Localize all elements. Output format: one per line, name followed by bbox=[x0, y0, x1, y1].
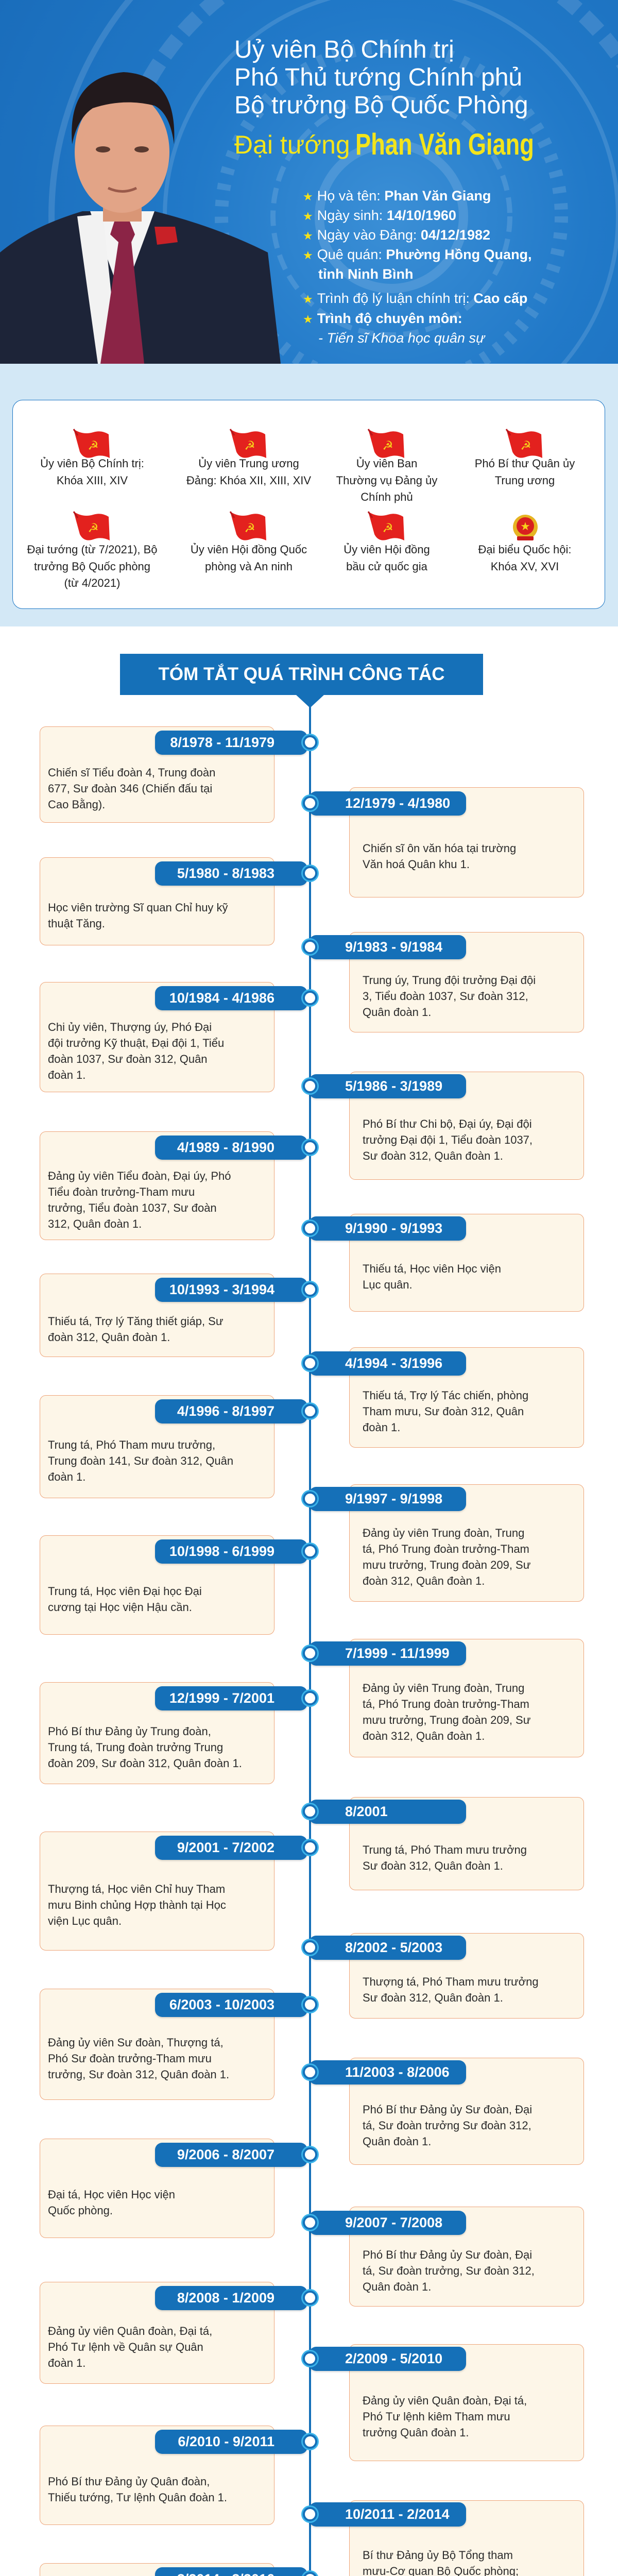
entry 9/2007: tá, Sư đoàn trưởng, Sư đoàn 312, bbox=[363, 2264, 535, 2277]
entry 8/2008: Đảng ủy viên Quân đoàn, Đại tá, bbox=[48, 2325, 212, 2337]
entry 9/2007: Quân đoàn 1. bbox=[363, 2280, 431, 2293]
date: 9/2001 - 7/2002: 9/2001 - 7/2002 bbox=[177, 1840, 274, 1855]
position text 8: Khóa XV, XVI bbox=[491, 560, 559, 573]
position text 7: Ủy viên Hội đồng bbox=[344, 543, 430, 556]
date: 8/1978 - 11/1979: 8/1978 - 11/1979 bbox=[170, 735, 274, 750]
date: 11/2003 - 8/2006 bbox=[309, 2060, 466, 2084]
entry 7/1999: tá, Phó Trung đoàn trưởng-Tham bbox=[363, 1698, 529, 1710]
date: 10/1998 - 6/1999 bbox=[155, 1539, 307, 1564]
info list: ★ Trình độ lý luận chính trị: Cao cấp bbox=[303, 291, 527, 306]
entry 7/1999 bbox=[349, 1639, 584, 1757]
entry 2/2009: Phó Tư lệnh kiêm Tham mưu bbox=[363, 2410, 510, 2423]
icon: party flag 4 bbox=[506, 429, 542, 458]
icon: national emblem: ★ bbox=[520, 520, 530, 533]
portrait photo bbox=[0, 72, 281, 364]
date: 10/1984 - 4/1986: 10/1984 - 4/1986 bbox=[169, 990, 274, 1006]
entry 9/1997 bbox=[349, 1484, 584, 1602]
entry 9/2007: Phó Bí thư Đảng ủy Sư đoàn, Đại bbox=[363, 2248, 532, 2261]
position text 3: Ủy viên Ban bbox=[356, 457, 417, 470]
entry 9/2001 bbox=[40, 1832, 274, 1951]
position text 1 bbox=[40, 456, 144, 486]
entry 6/2003: Phó Sư đoàn trưởng-Tham mưu bbox=[48, 2052, 212, 2065]
entry 12/1979 bbox=[349, 787, 584, 897]
date: 9/2001 - 7/2002 bbox=[155, 1836, 307, 1860]
date: 10/1998 - 6/1999: 10/1998 - 6/1999 bbox=[169, 1544, 274, 1559]
entry 4/1989: trưởng, Tiểu đoàn 1037, Sư đoàn bbox=[48, 1201, 217, 1214]
position text 7 bbox=[344, 543, 430, 573]
date: 8/2001: 8/2001 bbox=[345, 1804, 388, 1819]
entry 8/1978: Chiến sĩ Tiểu đoàn 4, Trung đoàn bbox=[48, 766, 215, 779]
entry 10/1984: đội trưởng Kỹ thuật, Đại đội 1, Tiểu bbox=[48, 1037, 224, 1049]
entry 4/1994: Thiếu tá, Trợ lý Tác chiến, phòng bbox=[363, 1389, 528, 1402]
entry 10/2011 bbox=[349, 2500, 584, 2576]
entry 11/2003 bbox=[349, 2058, 584, 2165]
date: 9/1997 - 9/1998 bbox=[309, 1487, 466, 1511]
date: 8/2002 - 5/2003: 8/2002 - 5/2003 bbox=[345, 1940, 442, 1955]
entry 8/2001 bbox=[349, 1797, 584, 1890]
entry 4/1994: Tham mưu, Sư đoàn 312, Quân bbox=[363, 1405, 524, 1418]
positions section background bbox=[0, 364, 618, 626]
entry 4/1996: Trung đoàn 141, Sư đoàn 312, Quân bbox=[48, 1454, 233, 1467]
date: 6/2003 - 10/2003 bbox=[155, 1993, 307, 2017]
title bbox=[234, 36, 528, 119]
entry 9/2006 bbox=[40, 2139, 274, 2238]
entry 6/2003: Đảng ủy viên Sư đoàn, Thượng tá, bbox=[48, 2036, 224, 2048]
node bbox=[303, 1140, 317, 1155]
date: 10/2011 - 2/2014 bbox=[309, 2502, 466, 2527]
entry 7/1999: đoàn 312, Quân đoàn 1. bbox=[363, 1730, 485, 1742]
date: 8/1978 - 11/1979 bbox=[155, 731, 307, 755]
entry 10/2011: Bí thư Đảng ủy Bộ Tổng tham bbox=[363, 2549, 513, 2562]
node bbox=[303, 2572, 317, 2576]
date: 4/1994 - 3/1996 bbox=[309, 1351, 466, 1376]
entry 10/1993 bbox=[40, 1274, 274, 1357]
date: 2/2009 - 5/2010: 2/2009 - 5/2010 bbox=[345, 2351, 442, 2366]
entry 6/2010: Thiếu tướng, Tư lệnh Quân đoàn 1. bbox=[48, 2490, 227, 2504]
entry 9/1990 bbox=[349, 1214, 584, 1312]
entry 10/1998 bbox=[40, 1535, 274, 1635]
date: 4/1996 - 8/1997: 4/1996 - 8/1997 bbox=[177, 1403, 274, 1419]
entry 7/1999: mưu trưởng, Trung đoàn 209, Sư bbox=[363, 1714, 530, 1726]
icon: party flag 5 bbox=[73, 511, 110, 540]
entry 9/1983: 3, Tiểu đoàn 1037, Sư đoàn 312, bbox=[363, 990, 528, 1003]
date: 6/2010 - 9/2011 bbox=[155, 2430, 307, 2454]
entry 8/1978: Cao Bằng). bbox=[48, 798, 105, 811]
entry 8/2008 bbox=[40, 2282, 274, 2384]
entry 9/1983: Trung úy, Trung đội trưởng Đại đội bbox=[363, 974, 536, 987]
date: 8/2001 bbox=[309, 1800, 466, 1824]
position text 3: Chính phủ bbox=[360, 490, 413, 503]
node bbox=[303, 1840, 317, 1855]
entry 9/1990: Thiếu tá, Học viên Học viện bbox=[363, 1262, 501, 1275]
entry 8/2002: Sư đoàn 312, Quân đoàn 1. bbox=[363, 1991, 503, 2004]
position text 4: Trung ương bbox=[495, 474, 555, 486]
date: 10/1993 - 3/1994 bbox=[155, 1278, 307, 1302]
name heading bbox=[234, 128, 534, 161]
entry 10/1993: Thiếu tá, Trợ lý Tăng thiết giáp, Sư bbox=[48, 1315, 224, 1328]
node bbox=[303, 1940, 317, 1955]
info list: ★ Ngày sinh: 14/10/1960 bbox=[303, 208, 456, 223]
node bbox=[303, 1544, 317, 1558]
position text 7: bầu cử quốc gia bbox=[346, 560, 427, 573]
date: 9/1983 - 9/1984: 9/1983 - 9/1984 bbox=[345, 939, 442, 955]
entry 12/1979: Chiến sĩ ôn văn hóa tại trường bbox=[363, 842, 516, 855]
entry 8/1978 bbox=[40, 726, 274, 823]
date: 8/2008 - 1/2009: 8/2008 - 1/2009 bbox=[177, 2290, 274, 2306]
node bbox=[303, 866, 317, 880]
node bbox=[303, 1804, 317, 1819]
entry 10/1998: Trung tá, Học viên Đại học Đại bbox=[48, 1585, 202, 1597]
entry 5/1980: Học viên trường Sĩ quan Chỉ huy kỹ bbox=[48, 901, 228, 914]
date: 3/2014 - 3/2016 bbox=[155, 2567, 307, 2576]
date: 5/1980 - 8/1983 bbox=[155, 861, 307, 886]
entry 9/2006: Đại tá, Học viên Học viện bbox=[48, 2188, 175, 2201]
position text 5 bbox=[27, 543, 158, 589]
entry 9/2001: Thượng tá, Học viên Chỉ huy Tham bbox=[48, 1883, 225, 1895]
node bbox=[303, 940, 317, 954]
node bbox=[303, 735, 317, 750]
position text 3 bbox=[336, 456, 438, 503]
entry 9/1983: Quân đoàn 1. bbox=[363, 1006, 431, 1019]
info list: ★ Trình độ chuyên môn: bbox=[303, 311, 462, 326]
entry 8/1978: 677, Sư đoàn 346 (Chiến đấu tại bbox=[48, 782, 212, 795]
position text 2: Đảng: Khóa XII, XIII, XIV bbox=[186, 474, 311, 486]
node bbox=[303, 1492, 317, 1506]
entry 9/1997: đoàn 312, Quân đoàn 1. bbox=[363, 1574, 485, 1587]
entry 8/2008: Phó Tư lệnh về Quân sự Quân bbox=[48, 2340, 203, 2353]
icon: national emblem bbox=[513, 515, 538, 540]
entry 4/1994: đoàn 1. bbox=[363, 1421, 400, 1434]
entry 6/2010: Phó Bí thư Đảng ủy Quân đoàn, bbox=[48, 2475, 210, 2487]
node bbox=[303, 1356, 317, 1370]
entry 9/2001: mưu Binh chủng Hợp thành tại Học bbox=[48, 1899, 226, 1911]
position text 2: Ủy viên Trung ương bbox=[198, 457, 299, 470]
name heading: Đại tướng bbox=[234, 130, 350, 159]
section heading bbox=[120, 654, 483, 707]
entry 4/1996 bbox=[40, 1395, 274, 1498]
entry 4/1994 bbox=[349, 1347, 584, 1448]
entry 3/2014 bbox=[40, 2563, 274, 2576]
date: 4/1994 - 3/1996: 4/1994 - 3/1996 bbox=[345, 1355, 442, 1371]
timeline line bbox=[309, 706, 311, 2576]
info list bbox=[303, 188, 532, 346]
date: 6/2010 - 9/2011: 6/2010 - 9/2011 bbox=[178, 2434, 274, 2449]
entry 12/1999: đoàn 209, Sư đoàn 312, Quân đoàn 1. bbox=[48, 1757, 242, 1769]
entry 5/1986: Phó Bí thư Chi bộ, Đại úy, Đại đội bbox=[363, 1117, 532, 1130]
entry 9/1997: Đảng ủy viên Trung đoàn, Trung bbox=[363, 1527, 524, 1539]
position text 5: trưởng Bộ Quốc phòng bbox=[34, 560, 150, 573]
entry 10/1998: cương tại Học viện Hậu cần. bbox=[48, 1600, 192, 1614]
entry 6/2010 bbox=[40, 2426, 274, 2525]
info list: ★ Quê quán: Phường Hồng Quang, bbox=[303, 247, 532, 262]
position text 1: Ủy viên Bộ Chính trị: bbox=[40, 457, 144, 470]
entry 5/1986: Sư đoàn 312, Quân đoàn 1. bbox=[363, 1149, 503, 1162]
position text 3: Thường vụ Đảng ủy bbox=[336, 474, 437, 486]
position text 2 bbox=[186, 456, 311, 486]
entry 9/2001: viện Lục quân. bbox=[48, 1914, 122, 1927]
entry 2/2009 bbox=[349, 2344, 584, 2461]
node bbox=[303, 2215, 317, 2230]
entry 8/2002: Thượng tá, Phó Tham mưu trưởng bbox=[363, 1975, 539, 1988]
info list: - Tiến sĩ Khoa học quân sự bbox=[318, 330, 485, 346]
date: 7/1999 - 11/1999: 7/1999 - 11/1999 bbox=[345, 1646, 450, 1661]
header background bbox=[0, 0, 618, 364]
entry 10/1984 bbox=[40, 982, 274, 1092]
entry 10/1993: đoàn 312, Quân đoàn 1. bbox=[48, 1331, 170, 1344]
entry 10/1984: đoàn 1. bbox=[48, 1069, 85, 1081]
date: 5/1980 - 8/1983: 5/1980 - 8/1983 bbox=[177, 866, 274, 881]
info list: tỉnh Ninh Bình bbox=[318, 266, 413, 282]
node bbox=[303, 2434, 317, 2449]
entry 4/1996: Trung tá, Phó Tham mưu trưởng, bbox=[48, 1438, 215, 1451]
info list: ★ Họ và tên: Phan Văn Giang bbox=[303, 188, 491, 204]
date: 4/1989 - 8/1990: 4/1989 - 8/1990 bbox=[177, 1140, 274, 1155]
date: 12/1999 - 7/2001 bbox=[155, 1686, 307, 1710]
date: 9/2007 - 7/2008 bbox=[309, 2211, 466, 2235]
position text 4: Phó Bí thư Quân ủy bbox=[475, 457, 575, 470]
date: 9/1990 - 9/1993 bbox=[309, 1216, 466, 1241]
entry 2/2009: trưởng Quân đoàn 1. bbox=[363, 2426, 469, 2439]
position text 5: Đại tướng (từ 7/2021), Bộ bbox=[27, 543, 158, 556]
entry 5/1980 bbox=[40, 857, 274, 945]
node bbox=[303, 2147, 317, 2162]
entry 12/1999: Phó Bí thư Đảng ủy Trung đoàn, bbox=[48, 1725, 211, 1737]
entry 8/2002 bbox=[349, 1933, 584, 2019]
entry 9/2007 bbox=[349, 2207, 584, 2307]
entry 7/1999: Đảng ủy viên Trung đoàn, Trung bbox=[363, 1682, 524, 1694]
entry 4/1989: Tiểu đoàn trưởng-Tham mưu bbox=[48, 1185, 195, 1198]
date: 9/2006 - 8/2007: 9/2006 - 8/2007 bbox=[177, 2147, 274, 2162]
title: Bộ trưởng Bộ Quốc Phòng bbox=[234, 92, 528, 119]
entry 6/2003: trưởng, Sư đoàn 312, Quân đoàn 1. bbox=[48, 2068, 229, 2080]
entry 8/2001: Trung tá, Phó Tham mưu trưởng bbox=[363, 1843, 527, 1856]
icon: party flag 3 bbox=[368, 429, 404, 458]
icon: party flag 2 bbox=[230, 429, 266, 458]
node bbox=[303, 1646, 317, 1660]
entry 11/2003: Quân đoàn 1. bbox=[363, 2135, 431, 2147]
entry 10/1984: Chi ủy viên, Thượng úy, Phó Đại bbox=[48, 1021, 212, 1033]
position text 6 bbox=[191, 543, 307, 573]
node bbox=[303, 796, 317, 810]
position text 6: Ủy viên Hội đồng Quốc bbox=[191, 543, 307, 556]
node bbox=[303, 2065, 317, 2079]
date: 6/2003 - 10/2003: 6/2003 - 10/2003 bbox=[169, 1997, 274, 2012]
node bbox=[303, 1997, 317, 2012]
node bbox=[303, 991, 317, 1005]
entry 9/1997: mưu trưởng, Trung đoàn 209, Sư bbox=[363, 1558, 530, 1571]
icon: party flag 7 bbox=[368, 511, 404, 540]
date: 9/1990 - 9/1993: 9/1990 - 9/1993 bbox=[345, 1221, 442, 1236]
info list: ★ Ngày vào Đảng: 04/12/1982 bbox=[303, 227, 490, 243]
position text 8 bbox=[478, 543, 572, 573]
node bbox=[303, 1404, 317, 1418]
title: Phó Thủ tướng Chính phủ bbox=[234, 64, 522, 91]
entry 12/1979: Văn hoá Quân khu 1. bbox=[363, 858, 470, 871]
position text 8: Đại biểu Quốc hội: bbox=[478, 543, 572, 556]
position text 1: Khóa XIII, XIV bbox=[57, 474, 128, 486]
date: 2/2009 - 5/2010 bbox=[309, 2347, 466, 2371]
date: 4/1996 - 8/1997 bbox=[155, 1399, 307, 1423]
entry 4/1989: Đảng ủy viên Tiểu đoàn, Đại úy, Phó bbox=[48, 1170, 231, 1182]
name heading: Phan Văn Giang bbox=[355, 128, 534, 161]
panel: positions bbox=[12, 400, 605, 609]
entry 9/1997: tá, Phó Trung đoàn trưởng-Tham bbox=[363, 1543, 529, 1555]
entry 5/1986: trưởng Đại đội 1, Tiểu đoàn 1037, bbox=[363, 1133, 533, 1146]
entry 9/1983 bbox=[349, 932, 584, 1032]
entry 9/2006: Quốc phòng. bbox=[48, 2204, 113, 2216]
position text 4 bbox=[475, 457, 575, 486]
icon: party flag 6 bbox=[230, 511, 266, 540]
node bbox=[303, 2291, 317, 2305]
date: 12/1979 - 4/1980 bbox=[309, 791, 466, 816]
entry 11/2003: Phó Bí thư Đảng ủy Sư đoàn, Đại bbox=[363, 2103, 532, 2115]
title: Uỷ viên Bộ Chính trị bbox=[234, 36, 454, 63]
entry 5/1980: thuật Tăng. bbox=[48, 917, 105, 929]
date: 8/2008 - 1/2009 bbox=[155, 2286, 307, 2310]
date: 9/1997 - 9/1998: 9/1997 - 9/1998 bbox=[345, 1491, 442, 1506]
node bbox=[303, 1079, 317, 1093]
date: 5/1986 - 3/1989: 5/1986 - 3/1989 bbox=[345, 1078, 442, 1094]
entry 12/1999 bbox=[40, 1682, 274, 1784]
position text 6: phòng và An ninh bbox=[205, 560, 293, 573]
entry 12/1999: Trung tá, Trung đoàn trưởng Trung bbox=[48, 1740, 223, 1754]
date: 4/1989 - 8/1990 bbox=[155, 1136, 307, 1160]
date: 12/1999 - 7/2001: 12/1999 - 7/2001 bbox=[169, 1690, 274, 1706]
date: 5/1986 - 3/1989 bbox=[309, 1074, 466, 1098]
node bbox=[303, 1221, 317, 1235]
entry 10/1984: đoàn 1037, Sư đoàn 312, Quân bbox=[48, 1053, 208, 1065]
entry 6/2003 bbox=[40, 1989, 274, 2100]
entry 8/2001: Sư đoàn 312, Quân đoàn 1. bbox=[363, 1859, 503, 1872]
node bbox=[303, 1691, 317, 1705]
date: 8/2002 - 5/2003 bbox=[309, 1936, 466, 1960]
node bbox=[303, 2507, 317, 2521]
node bbox=[303, 1282, 317, 1297]
node bbox=[303, 2351, 317, 2366]
date: 9/2006 - 8/2007 bbox=[155, 2143, 307, 2167]
date: 11/2003 - 8/2006: 11/2003 - 8/2006 bbox=[345, 2064, 450, 2080]
entry 4/1996: đoàn 1. bbox=[48, 1470, 85, 1483]
date: 12/1979 - 4/1980: 12/1979 - 4/1980 bbox=[345, 795, 450, 811]
entry 4/1989 bbox=[40, 1131, 274, 1240]
entry 8/2008: đoàn 1. bbox=[48, 2357, 85, 2369]
entry 9/1990: Lục quân. bbox=[363, 1278, 413, 1291]
position text 5: (từ 4/2021) bbox=[64, 577, 120, 589]
entry 4/1989: 312, Quân đoàn 1. bbox=[48, 1217, 142, 1230]
date: 9/2007 - 7/2008: 9/2007 - 7/2008 bbox=[345, 2215, 442, 2230]
entry 2/2009: Đảng ủy viên Quân đoàn, Đại tá, bbox=[363, 2394, 527, 2407]
section heading: TÓM TẮT QUÁ TRÌNH CÔNG TÁC bbox=[158, 664, 445, 684]
date: 10/2011 - 2/2014: 10/2011 - 2/2014 bbox=[345, 2506, 450, 2522]
icon: party flag 1 bbox=[73, 429, 110, 458]
date: 7/1999 - 11/1999 bbox=[309, 1641, 466, 1666]
date: 10/1993 - 3/1994: 10/1993 - 3/1994 bbox=[169, 1282, 274, 1297]
entry 5/1986 bbox=[349, 1072, 584, 1180]
date: 9/1983 - 9/1984 bbox=[309, 935, 466, 959]
date: 10/1984 - 4/1986 bbox=[155, 986, 307, 1010]
entry 11/2003: tá, Sư đoàn trưởng Sư đoàn 312, bbox=[363, 2119, 531, 2132]
